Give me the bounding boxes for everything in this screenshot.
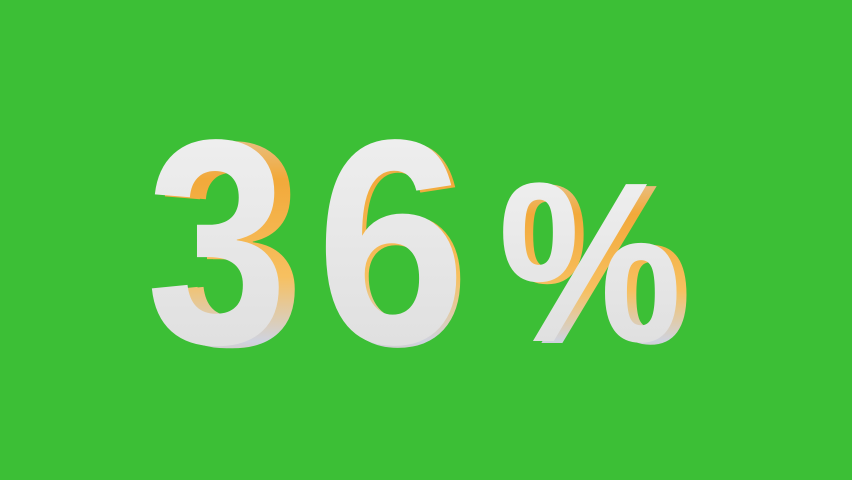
digit 6: 6 xyxy=(320,81,470,407)
percent sign: % xyxy=(498,136,682,390)
digit 3: 3 xyxy=(162,81,304,407)
digit 3: 3 xyxy=(146,79,288,405)
digit 3: 3 xyxy=(156,81,298,407)
percent sign: % xyxy=(506,138,692,392)
digit 6: 6 xyxy=(316,79,466,405)
